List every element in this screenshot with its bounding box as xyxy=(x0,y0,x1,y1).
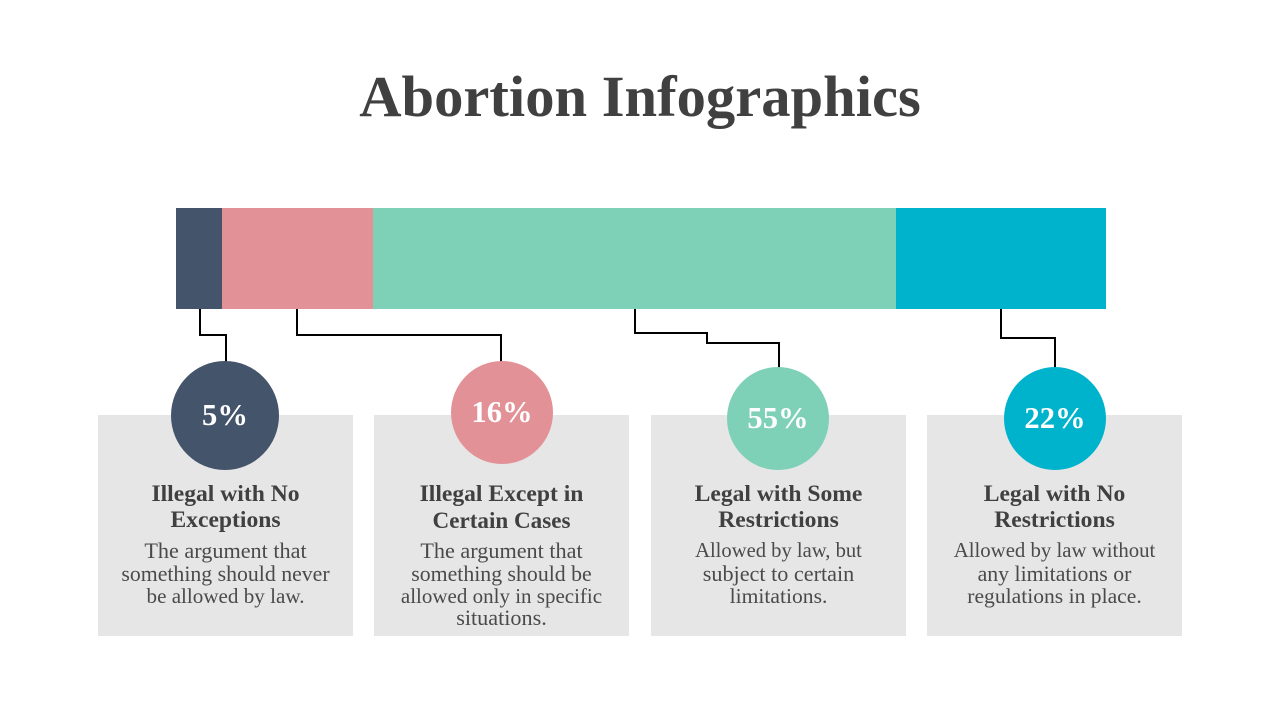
card: legal with no restrictions: Restrictions xyxy=(994,507,1115,533)
circle: 22% xyxy=(1004,367,1106,470)
card: illegal except in certain cases: Certain Cases xyxy=(433,507,570,533)
card: legal with no restrictions: Legal with No xyxy=(984,481,1125,507)
card: legal with some restrictions: Allowed by law, but xyxy=(695,540,862,562)
card: illegal except in certain cases: something should be xyxy=(411,562,592,586)
card: illegal with no exceptions: something should never xyxy=(121,562,330,586)
card: illegal except in certain cases: Illegal Except in xyxy=(420,481,583,507)
card: illegal with no exceptions xyxy=(98,415,353,636)
card: legal with no restrictions: regulations in place. xyxy=(967,584,1142,608)
circle: 16%: 16% xyxy=(471,395,533,429)
card: legal with some restrictions: Legal with Some xyxy=(695,481,862,507)
card: illegal except in certain cases: allowed only in specific xyxy=(401,584,602,608)
card: illegal with no exceptions: Exceptions xyxy=(170,507,281,533)
circle: 55% xyxy=(727,367,829,470)
card: legal with some restrictions: Restrictions xyxy=(718,507,839,533)
card: legal with no restrictions xyxy=(927,415,1182,636)
circle: 5% xyxy=(171,361,279,470)
card: legal with no restrictions: Allowed by law without xyxy=(954,539,1155,562)
card: legal with some restrictions xyxy=(651,415,906,636)
circle: 5%: 5% xyxy=(202,398,248,432)
circle: 16% xyxy=(451,361,553,464)
card: legal with no restrictions: any limitations or xyxy=(978,562,1131,586)
stacked bar xyxy=(176,208,1106,309)
card: legal with some restrictions: subject to certain xyxy=(703,561,854,586)
card: illegal except in certain cases: situations. xyxy=(456,605,547,630)
circle: 22%: 22% xyxy=(1024,401,1086,435)
card: illegal with no exceptions: be allowed by law. xyxy=(147,584,304,608)
card: illegal except in certain cases xyxy=(374,415,629,636)
card: illegal except in certain cases: The argument that xyxy=(420,538,583,563)
card: legal with some restrictions: limitations. xyxy=(730,584,827,608)
circle: 55%: 55% xyxy=(747,401,809,435)
card: illegal with no exceptions: Illegal with No xyxy=(151,481,300,507)
title: Abortion Infographics xyxy=(359,64,921,129)
card: illegal with no exceptions: The argument that xyxy=(144,538,307,563)
